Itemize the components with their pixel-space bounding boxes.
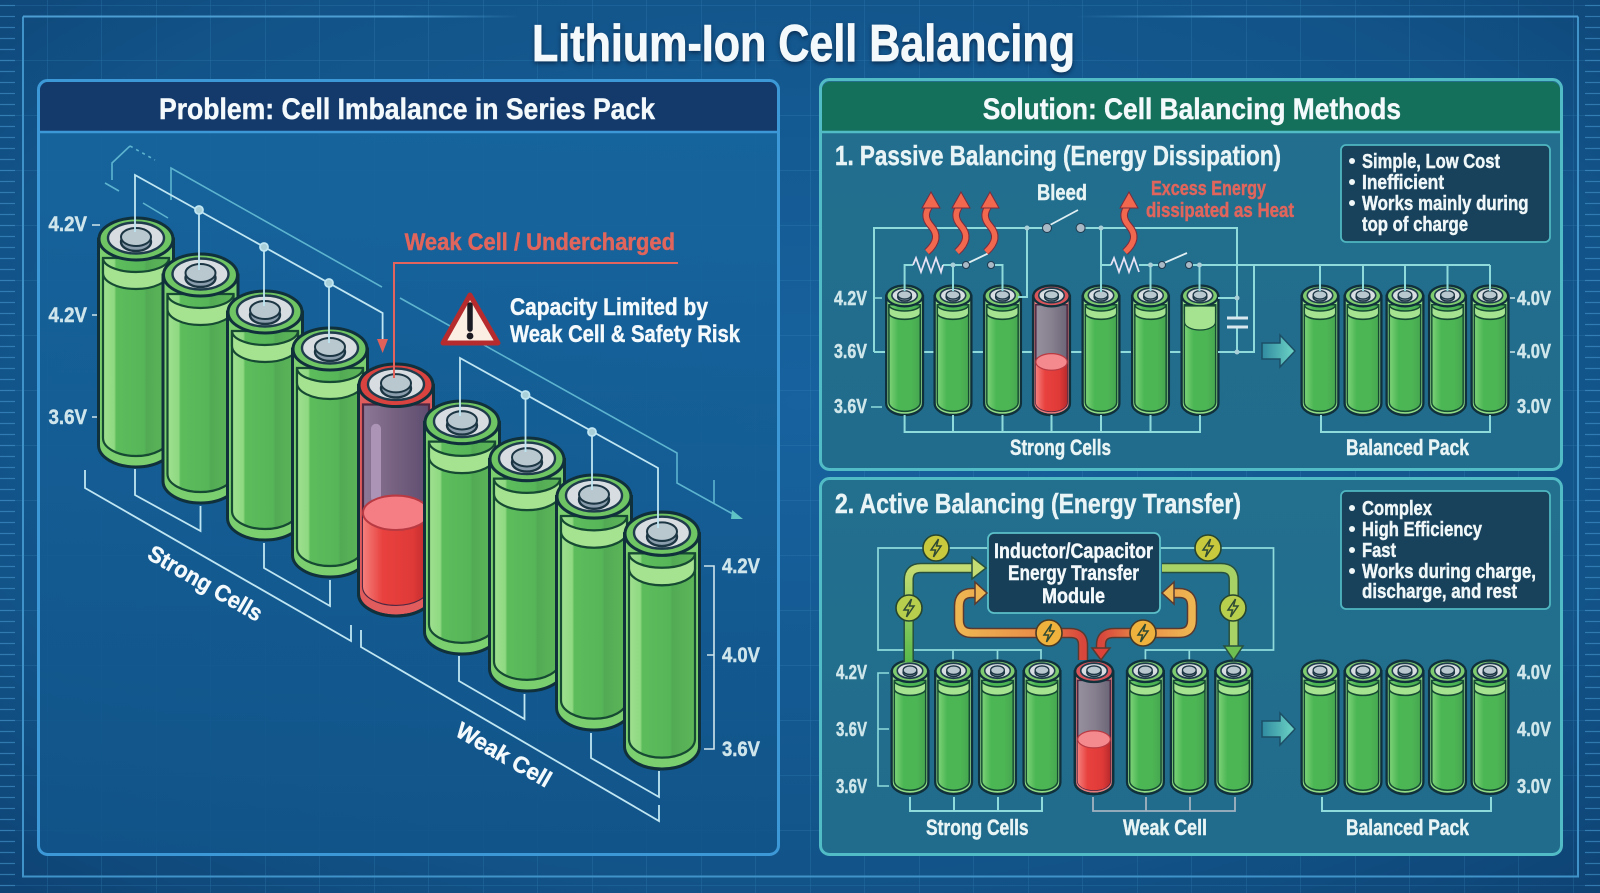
- icon: heat arrows: [922, 192, 1138, 252]
- active heading: 2. Active Balancing (Energy Transfer): [835, 488, 1241, 519]
- excess energy label: Excess Energy: [1151, 178, 1267, 200]
- solution header bar: [822, 82, 1560, 131]
- passive strong and weak cells: [886, 286, 1218, 415]
- passive left voltages: [834, 288, 882, 418]
- problem header bar: [40, 82, 777, 131]
- active info box: [1341, 491, 1550, 609]
- passive info box: Works mainly during: [1362, 193, 1529, 215]
- excess energy label: [1146, 178, 1294, 222]
- passive rear bus wire: [874, 351, 1254, 353]
- passive left voltages: 3.6V: [834, 341, 868, 363]
- arrow: module to weak-side cell: [1162, 568, 1243, 660]
- active bottom labels: Strong Cells: [926, 815, 1029, 840]
- active info box: High Efficiency: [1362, 519, 1483, 541]
- passive heading: 1. Passive Balancing (Energy Dissipation): [835, 140, 1281, 171]
- title: Lithium-Ion Cell Balancing: [532, 15, 1075, 73]
- label: weak cell: Weak Cell: [452, 717, 556, 792]
- series wiring: [135, 175, 658, 528]
- left voltage labels: 4.2V: [48, 213, 87, 236]
- active left voltages: 4.2V: [836, 662, 867, 684]
- active bottom labels: [926, 815, 1470, 840]
- right voltage labels: 3.6V: [722, 738, 760, 761]
- active right voltages: 3.0V: [1517, 776, 1552, 798]
- passive left voltages: 4.2V: [834, 288, 868, 310]
- solution heading: Solution: Cell Balancing Methods: [983, 93, 1401, 126]
- panel: problem: [38, 80, 778, 854]
- active bottom labels: Weak Cell: [1123, 815, 1207, 840]
- bleed circuit: [874, 210, 1490, 354]
- faint diagonal guide lines: [105, 146, 743, 519]
- arrow: passive to balanced: [1262, 335, 1295, 367]
- active info box: Fast: [1362, 540, 1396, 562]
- active thin wires: [878, 548, 1274, 662]
- active right voltages: [1517, 662, 1552, 798]
- capacity warning text: [510, 294, 741, 348]
- right voltage labels: 4.2V: [722, 555, 760, 578]
- passive right voltages: 3.0V: [1517, 396, 1552, 418]
- arrow to weak cell: [377, 339, 388, 353]
- active info box: discharge, and rest: [1362, 581, 1517, 603]
- capacity warning text: Capacity Limited by: [510, 294, 709, 321]
- active left voltages: 3.6V: [836, 776, 867, 798]
- right voltage labels: [704, 555, 760, 761]
- passive bottom labels: Strong Cells: [1010, 435, 1111, 460]
- passive bottom labels: Balanced Pack: [1346, 435, 1470, 460]
- arrow: strong cell to module: [909, 557, 986, 662]
- left voltage labels: 3.6V: [48, 406, 87, 429]
- active cells: [892, 661, 1252, 794]
- transfer module: [988, 533, 1160, 613]
- passive right voltages: 4.0V: [1517, 341, 1552, 363]
- capacity warning text: Weak Cell & Safety Risk: [510, 321, 741, 348]
- active right voltages: 4.0V: [1517, 719, 1552, 741]
- weak cell callout: [394, 229, 678, 378]
- weak cell callout: Weak Cell / Undercharged: [405, 229, 675, 256]
- passive info box: top of charge: [1362, 214, 1468, 236]
- active bottom labels: Balanced Pack: [1346, 815, 1470, 840]
- label: strong cells: Strong Cells: [144, 540, 267, 626]
- right voltage labels: 4.0V: [722, 644, 760, 667]
- passive right voltages: 4.0V: [1517, 288, 1552, 310]
- left voltage labels: 4.2V: [48, 304, 87, 327]
- passive left voltages: 3.6V: [834, 396, 868, 418]
- arrow: module right to weak cell: [1092, 582, 1192, 660]
- panel: solution: [820, 80, 1562, 470]
- excess energy label: dissipated as Heat: [1146, 200, 1294, 222]
- active brackets: [910, 797, 1491, 811]
- icon: warning triangle: [443, 295, 498, 343]
- active right voltages: 4.0V: [1517, 662, 1552, 684]
- section: active balancing: [820, 478, 1562, 854]
- left voltage labels: [48, 213, 100, 429]
- diagonal brackets: [85, 469, 659, 821]
- active info box: Works during charge,: [1362, 561, 1536, 583]
- icon: energy badges: [896, 535, 1246, 646]
- passive info box: Inefficient: [1362, 172, 1444, 194]
- isometric row of nine cells: [98, 218, 700, 769]
- passive brackets: [905, 415, 1490, 432]
- active left voltages: [836, 662, 889, 798]
- passive info box: [1341, 145, 1550, 242]
- active balanced pack cells: [1302, 661, 1508, 794]
- transfer module: Inductor/Capacitor: [994, 540, 1153, 563]
- section: passive balancing: [834, 140, 1552, 460]
- passive info box: Simple, Low Cost: [1362, 151, 1500, 173]
- problem heading: Problem: Cell Imbalance in Series Pack: [159, 93, 655, 126]
- arrow: active to balanced: [1262, 713, 1295, 745]
- arrow: weak cell to module left: [959, 582, 1083, 660]
- passive right voltages: [1510, 288, 1552, 418]
- active left voltages: 3.6V: [836, 719, 867, 741]
- passive bottom labels: [1010, 435, 1470, 460]
- transfer module: Module: [1042, 585, 1105, 608]
- passive balanced pack cells: [1302, 286, 1508, 415]
- bleed label: Bleed: [1037, 180, 1087, 205]
- transfer module: Energy Transfer: [1008, 562, 1139, 585]
- active info box: Complex: [1362, 498, 1432, 520]
